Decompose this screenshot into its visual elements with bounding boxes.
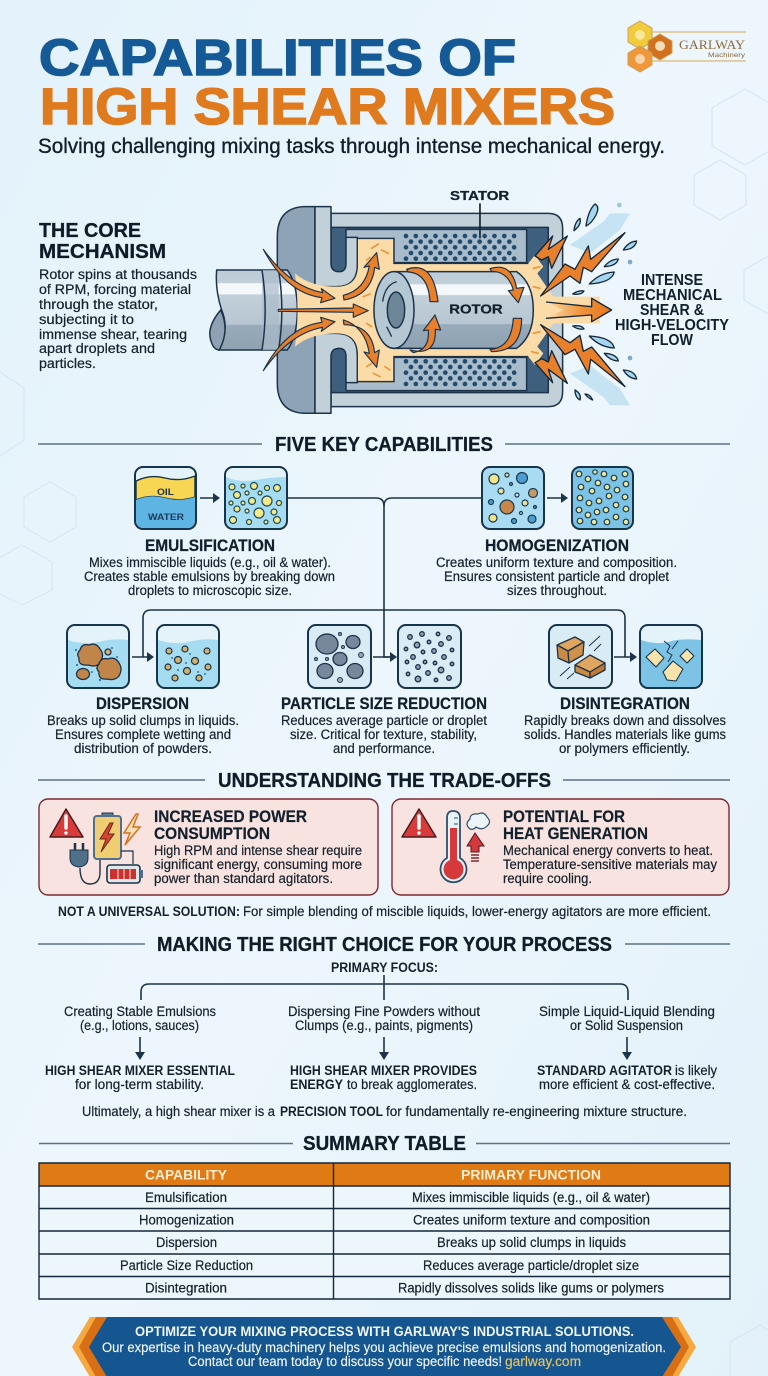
capability: dispersion: distribution of powders.: [74, 741, 212, 756]
table rows: Breaks up solid clumps in liquids: [437, 1235, 626, 1250]
capability: homogenization: Creates uniform texture and composition.: [436, 555, 677, 570]
conclusion text: [82, 1104, 687, 1119]
text block: the core mechanism: [39, 220, 197, 371]
title: [39, 29, 615, 135]
column: fine powders: ENERGY: [290, 1077, 343, 1092]
title: CAPABILITIES OF: [39, 29, 516, 86]
panel: potential for heat generation: require cooling.: [503, 871, 592, 886]
icon: warning triangle: [50, 809, 83, 837]
capability: emulsification: Mixes immiscible liquids (e.g., oil & water).: [89, 555, 331, 570]
table rows: [120, 1190, 664, 1296]
text block: the core mechanism: subjecting it to: [39, 312, 134, 327]
text block: the core mechanism: THE CORE: [39, 220, 141, 242]
table header: [39, 1163, 730, 1186]
table rows: Particle Size Reduction: [120, 1258, 253, 1273]
icon: uniform particles: [572, 467, 633, 529]
table rows: Creates uniform texture and composition: [413, 1212, 650, 1228]
panel: increased power consumption: [39, 799, 378, 895]
panel: increased power consumption: CONSUMPTION: [154, 824, 270, 843]
panel: increased power consumption: INCREASED POWER: [154, 807, 307, 826]
capability: disintegration: DISINTEGRATION: [560, 694, 690, 713]
table rows: Mixes immiscible liquids (e.g., oil & water): [412, 1190, 650, 1205]
call to action banner: Our expertise in heavy-duty machinery helps you achieve precise emulsions and homogenization.: [102, 1340, 666, 1355]
panel: increased power consumption: High RPM and intense shear require: [154, 843, 362, 858]
panel: potential for heat generation: HEAT GENERATION: [503, 824, 648, 843]
column: stable emulsions: Creating Stable Emulsions: [64, 1004, 216, 1019]
label: intense mechanical shear: [615, 272, 730, 349]
column: stable emulsions: [45, 1004, 235, 1092]
icon: battery, plug and power: [70, 813, 143, 884]
icon: large particles: [308, 625, 371, 688]
logo: Garlway Machinery: GARLWAY: [679, 37, 746, 52]
capability: particle size reduction: size. Critical for texture, stability,: [290, 727, 477, 742]
capability: disintegration: or polymers efficiently.: [559, 741, 690, 756]
text block: the core mechanism: apart droplets and: [39, 341, 155, 356]
text block: the core mechanism: Rotor spins at thousands: [39, 267, 197, 282]
column: simple blending: more efficient & cost-effective.: [539, 1077, 715, 1092]
column: simple blending: or Solid Suspension: [570, 1018, 683, 1033]
label: stator: [450, 188, 510, 238]
capability: homogenization: Ensures consistent particle and droplet: [444, 569, 669, 584]
capability: emulsification: [84, 467, 335, 598]
column: simple blending: [537, 1004, 717, 1092]
column: fine powders: Dispersing Fine Powders without: [288, 1004, 480, 1019]
logo: Garlway Machinery: Machinery: [708, 53, 745, 59]
column: simple blending: Simple Liquid-Liquid Blending: [539, 1004, 715, 1019]
label: stator: STATOR: [450, 188, 510, 203]
table header: CAPABILITY: [145, 1168, 227, 1182]
subtitle: Solving challenging mixing tasks through intense mechanical energy.: [38, 135, 665, 158]
label: intense mechanical shear: FLOW: [651, 332, 693, 349]
text block: the core mechanism: through the stator,: [39, 297, 158, 312]
icon: emulsified beaker: [225, 467, 287, 529]
icon: clumps in liquid: [67, 625, 129, 688]
capability: dispersion: Breaks up solid clumps in liquids.: [47, 713, 239, 728]
capability: particle size reduction: [281, 625, 487, 756]
icon: dispersed particles: [157, 625, 219, 688]
icon: dissolving solids: [640, 625, 702, 688]
column: stable emulsions: (e.g., lotions, sauces): [80, 1018, 199, 1033]
burst: bolts, jet and droplets: [535, 203, 637, 405]
icon: oil and water: OIL: [157, 487, 175, 497]
label: intense mechanical shear: INTENSE: [641, 272, 703, 289]
table rows: Rapidly dissolves solids like gums or polymers: [398, 1280, 664, 1296]
column: stable emulsions: HIGH SHEAR MIXER ESSENTIAL: [45, 1063, 235, 1078]
panel: potential for heat generation: [392, 799, 729, 895]
flow region: [295, 237, 600, 383]
title: HIGH SHEAR MIXERS: [40, 78, 615, 135]
panel: potential for heat generation: POTENTIAL FOR: [503, 807, 625, 826]
heading: summary table: SUMMARY TABLE: [303, 1133, 466, 1155]
column: fine powders: Clumps (e.g., paints, pigments): [295, 1018, 473, 1033]
label: intense mechanical shear: HIGH-VELOCITY: [615, 317, 730, 334]
capability: emulsification: Creates stable emulsions by breaking down: [84, 569, 335, 584]
connector lines between capabilities: [132, 498, 634, 657]
panel: increased power consumption: power than standard agitators.: [154, 871, 333, 886]
capability: emulsification: droplets to microscopic size.: [128, 583, 292, 598]
icon: thermometer, steam and heat arrow: [440, 811, 490, 882]
column: simple blending: is likely: [675, 1063, 717, 1078]
table rows: Homogenization: [139, 1212, 234, 1228]
label: intense mechanical shear: SHEAR &: [640, 302, 704, 319]
capability: particle size reduction: PARTICLE SIZE REDUCTION: [281, 694, 487, 713]
icon: oil and water: WATER: [148, 512, 185, 522]
text block: the core mechanism: of RPM, forcing material: [39, 282, 191, 297]
capability: particle size reduction: and performance.: [333, 741, 435, 756]
icon: uneven particles: [482, 467, 544, 529]
capability: dispersion: DISPERSION: [96, 694, 189, 713]
logo: Garlway Machinery: [628, 21, 746, 72]
capability: homogenization: HOMOGENIZATION: [485, 536, 629, 555]
icon: fine particles: [398, 625, 461, 688]
capability: disintegration: solids. Handles materials like gums: [524, 727, 726, 742]
panel: potential for heat generation: Mechanical energy converts to heat.: [503, 843, 713, 858]
capability: disintegration: Rapidly breaks down and dissolves: [524, 713, 726, 728]
call to action banner: garlway.com: [505, 1354, 581, 1369]
capability: homogenization: [436, 467, 677, 598]
note: not a universal solution: For simple blending of miscible liquids, lower-energy agitators are more efficient.: [243, 904, 711, 919]
note: not a universal solution: NOT A UNIVERSAL SOLUTION:: [58, 904, 240, 919]
capability: homogenization: sizes throughout.: [507, 583, 607, 598]
text block: the core mechanism: MECHANISM: [39, 241, 166, 263]
conclusion text: Ultimately, a high shear mixer is a: [82, 1104, 276, 1119]
panel: increased power consumption: significant energy, consuming more: [154, 857, 362, 872]
summary table: [39, 1163, 730, 1299]
icon: warning triangle: [402, 809, 436, 837]
label: rotor: ROTOR: [449, 301, 503, 316]
table rows: Disintegration: [145, 1280, 227, 1296]
column: stable emulsions: for long-term stability.: [75, 1077, 204, 1092]
decision tree: [45, 960, 717, 1092]
icon: oil and water: [135, 467, 196, 529]
capability: dispersion: Ensures complete wetting and: [55, 727, 231, 742]
text block: the core mechanism: particles.: [39, 356, 96, 371]
label: intense mechanical shear: MECHANICAL: [623, 287, 722, 304]
diagram: rotor-stator mixer cross-section: [210, 188, 600, 413]
call to action banner: [72, 1317, 696, 1376]
heading: five key capabilities: FIVE KEY CAPABILITIES: [275, 434, 493, 456]
capability: particle size reduction: Reduces average particle or droplet: [281, 713, 487, 728]
flow specks: [363, 244, 540, 377]
column: simple blending: STANDARD AGITATOR: [537, 1063, 672, 1078]
conclusion text: for fundamentally re-engineering mixture structure.: [386, 1104, 687, 1119]
call to action banner: Contact our team today to discuss your specific needs!: [188, 1354, 502, 1369]
shaft: [210, 270, 297, 350]
flow arrows: [263, 249, 524, 371]
column: fine powders: HIGH SHEAR MIXER PROVIDES: [290, 1063, 477, 1078]
rotor: [374, 272, 533, 348]
panel: potential for heat generation: Temperature-sensitive materials may: [503, 857, 717, 872]
column: fine powders: [288, 1004, 480, 1092]
column: fine powders: to break agglomerates.: [347, 1077, 477, 1092]
table rows: Reduces average particle/droplet size: [423, 1258, 639, 1273]
call to action banner: OPTIMIZE YOUR MIXING PROCESS WITH GARLWAY'S INDUSTRIAL SOLUTIONS.: [135, 1324, 634, 1339]
text block: the core mechanism: immense shear, tearing: [39, 327, 187, 342]
capability: dispersion: [47, 625, 239, 756]
capability: disintegration: [524, 625, 726, 756]
capability: emulsification: EMULSIFICATION: [145, 536, 275, 555]
connector arrowheads: [147, 493, 637, 662]
heading: understanding the trade-offs: UNDERSTANDING THE TRADE-OFFS: [218, 770, 551, 792]
decision tree: PRIMARY FOCUS:: [331, 960, 438, 975]
conclusion text: PRECISION TOOL: [280, 1104, 383, 1119]
table rows: Emulsification: [145, 1190, 227, 1205]
table header: PRIMARY FUNCTION: [461, 1168, 601, 1182]
table rows: Dispersion: [156, 1235, 217, 1250]
icon: solid cubes: [549, 625, 612, 688]
heading: making the right choice: MAKING THE RIGHT CHOICE FOR YOUR PROCESS: [157, 934, 612, 956]
